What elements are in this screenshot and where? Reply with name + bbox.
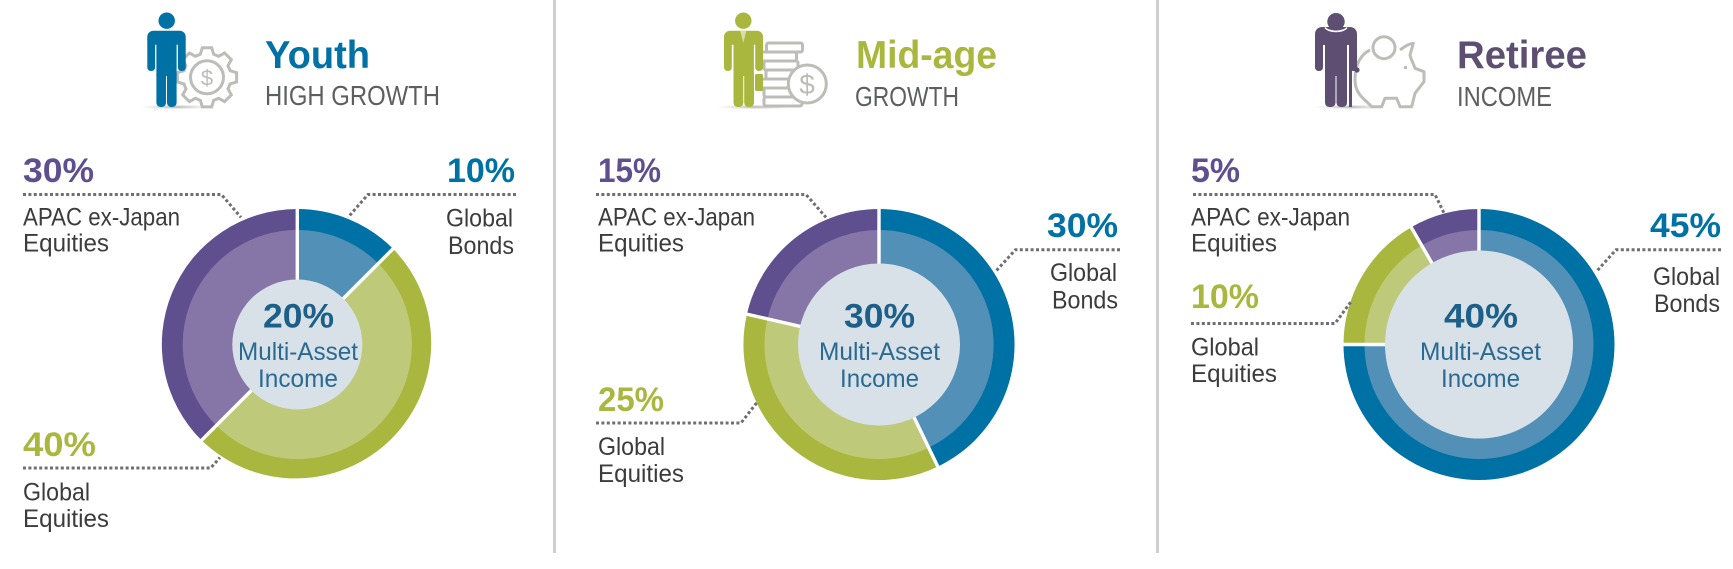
icon: mid-age with coin stack <box>717 13 826 109</box>
donut chart: Retiree: Income <box>1441 365 1520 393</box>
callout: APAC ex-Japan Equities 5% <box>1191 152 1444 258</box>
callout: Global Bonds 30%: Global <box>1050 259 1117 287</box>
callout: APAC ex-Japan Equities 5%: 5% <box>1191 152 1240 190</box>
callout: APAC ex-Japan Equities 5%: Equities <box>1191 230 1277 258</box>
donut chart: Retiree: 40% <box>1444 298 1518 336</box>
callout: Global Equities 40%: Global <box>23 478 90 506</box>
donut chart: Mid-age: Income <box>840 365 919 393</box>
callout: APAC ex-Japan Equities 30%: 30% <box>23 152 94 190</box>
callout: Global Equities 10%: Equities <box>1191 360 1277 388</box>
panel: Mid-age <box>596 13 1120 488</box>
heading: Youth: Youth <box>265 34 370 77</box>
callout: Global Bonds 45%: Bonds <box>1654 290 1720 318</box>
callout: APAC ex-Japan Equities 30% <box>23 152 241 258</box>
donut chart: Youth <box>162 206 431 478</box>
callout: Global Equities 10%: 10% <box>1191 278 1259 316</box>
callout: Global Equities 10% <box>1191 278 1352 388</box>
subheading: Income: INCOME <box>1457 81 1552 112</box>
icon: retiree with piggy bank <box>1314 13 1424 109</box>
callout: APAC ex-Japan Equities 15%: APAC ex-Japan <box>598 204 755 232</box>
callout: Global Bonds 45%: Global <box>1653 263 1720 291</box>
callout: Global Equities 40%: Equities <box>23 505 109 533</box>
callout: APAC ex-Japan Equities 15%: 15% <box>598 152 661 190</box>
callout: Global Equities 10%: Global <box>1191 333 1259 361</box>
callout: Global Equities 40% <box>23 426 220 533</box>
subheading: High Growth: HIGH GROWTH <box>265 80 440 111</box>
callout: APAC ex-Japan Equities 15% <box>596 152 826 258</box>
callout: Global Bonds 45% <box>1597 207 1721 318</box>
donut chart: Mid-age: Multi-Asset <box>819 338 940 366</box>
callout: Global Equities 40%: 40% <box>23 426 96 464</box>
icon: mid-age with coin stack: $ <box>799 69 815 100</box>
callout: APAC ex-Japan Equities 5%: APAC ex-Japan <box>1191 204 1350 232</box>
donut chart: Mid-age: 30% <box>844 298 915 336</box>
callout: Global Bonds 30% <box>996 207 1120 314</box>
callout: APAC ex-Japan Equities 30%: Equities <box>23 230 109 258</box>
callout: Global Equities 25%: 25% <box>598 381 664 419</box>
callout: Global Bonds 10%: Bonds <box>448 232 514 260</box>
donut chart: Youth: Income <box>258 365 338 393</box>
callout: Global Bonds 10% <box>348 152 516 260</box>
donut chart: Retiree: Multi-Asset <box>1420 338 1541 366</box>
heading: Mid-age: Mid-age <box>856 34 997 77</box>
icon: youth with gear: $ <box>201 65 213 90</box>
donut chart: Youth: 20% <box>263 298 334 336</box>
donut chart: Retiree <box>1340 206 1614 480</box>
callout: Global Bonds 10%: 10% <box>447 152 515 190</box>
icon: youth with gear <box>140 13 237 109</box>
donut chart: Youth: Multi-Asset <box>238 338 358 366</box>
heading: Retiree: Retiree <box>1457 34 1587 77</box>
callout: Global Bonds 30%: 30% <box>1047 207 1118 245</box>
donut chart: Mid-age <box>743 206 1015 480</box>
callout: APAC ex-Japan Equities 15%: Equities <box>598 230 684 258</box>
panel: Retiree <box>1191 13 1721 480</box>
subheading: Growth: GROWTH <box>855 81 959 112</box>
callout: Global Equities 25%: Global <box>598 433 665 461</box>
callout: APAC ex-Japan Equities 30%: APAC ex-Japan <box>23 204 180 232</box>
panel: Youth <box>23 13 516 533</box>
callout: Global Equities 25%: Equities <box>598 460 684 488</box>
callout: Global Bonds 10%: Global <box>446 204 513 232</box>
callout: Global Equities 25% <box>596 381 757 488</box>
callout: Global Bonds 45%: 45% <box>1650 207 1721 245</box>
callout: Global Bonds 30%: Bonds <box>1052 286 1118 314</box>
